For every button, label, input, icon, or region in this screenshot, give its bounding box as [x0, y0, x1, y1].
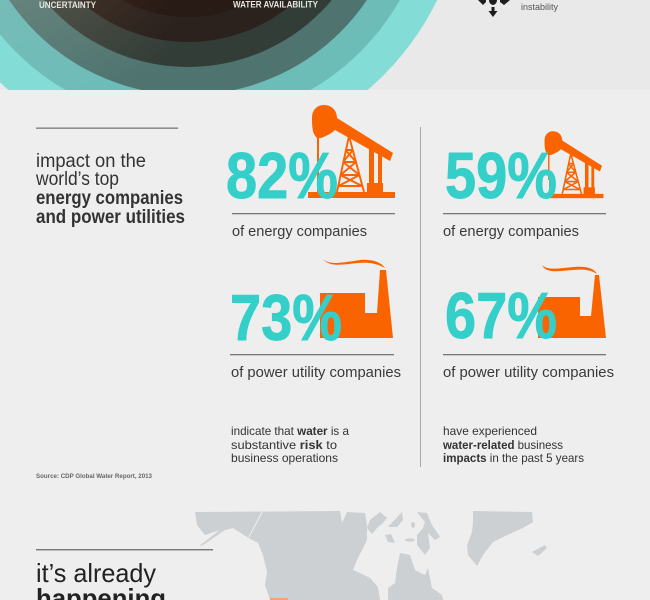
icon: instability arrows — [478, 0, 510, 17]
heading: impact on top companies: world’s top — [35, 169, 119, 190]
note: substantive risk — [231, 424, 349, 465]
icon: oil pump large — [308, 105, 395, 198]
concentric water circles — [0, 0, 438, 90]
heading: it's already happening: it’s already — [36, 558, 156, 588]
note: business impacts — [442, 424, 584, 465]
stat: 67%: 67% — [445, 279, 557, 352]
rule: 82% — [232, 213, 395, 214]
rule: section two — [36, 549, 213, 550]
map: north america — [195, 511, 547, 600]
rule: 73% — [230, 354, 394, 355]
caption: 73% of power utility companies: of power utility companies — [231, 365, 401, 381]
rule: section one — [36, 128, 178, 129]
icon: oil pump small — [542, 131, 603, 198]
note: substantive risk: business operations — [231, 451, 338, 465]
heading: impact on top companies — [35, 151, 185, 228]
column divider — [420, 127, 421, 467]
label: instability: instability — [521, 2, 558, 12]
source note: Source: CDP Global Water Report, 2013 — [36, 473, 152, 480]
note: business impacts: water-related business — [442, 438, 563, 452]
note: substantive risk: substantive risk to — [231, 438, 337, 452]
caption: 82% of energy companies: of energy companies — [232, 224, 367, 240]
caption: 59% of energy companies: of energy companies — [443, 224, 579, 240]
map border line — [249, 512, 262, 537]
icon: factory left — [320, 259, 393, 338]
stat: 73%: 73% — [230, 281, 342, 354]
icon: factory right — [538, 265, 606, 338]
heading: impact on top companies: impact on the — [36, 151, 146, 172]
map highlight: orange region — [270, 598, 288, 600]
rule: 59% — [443, 213, 606, 214]
rule: 67% — [443, 354, 606, 355]
stat: 82%: 82% — [226, 139, 338, 212]
heading: impact on top companies: energy companies — [36, 188, 183, 209]
note: business impacts: impacts in the past 5 years — [443, 451, 584, 465]
stat: 59%: 59% — [445, 139, 557, 212]
note: business impacts: have experienced — [443, 424, 537, 438]
heading: it's already happening — [36, 558, 166, 600]
note: substantive risk: indicate that water is a — [231, 424, 349, 438]
caption: 67% of power utility companies: of power utility companies — [443, 365, 614, 381]
heading: impact on top companies: and power utilities — [36, 207, 185, 228]
label: uncertainty: UNCERTAINTY — [39, 0, 96, 10]
